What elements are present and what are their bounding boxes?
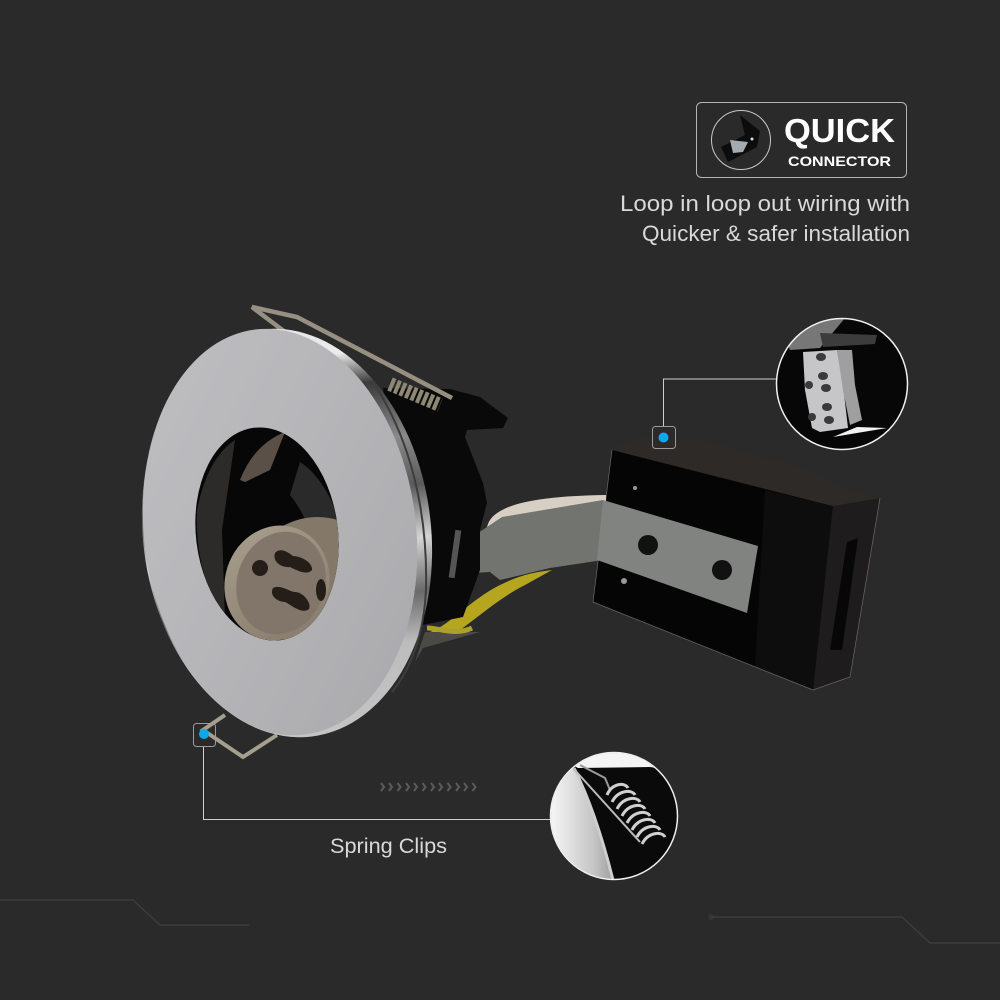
circuit line left bbox=[0, 900, 249, 925]
inset: connector detail bbox=[776, 318, 908, 450]
body bbox=[383, 388, 508, 625]
badge: quick connector bbox=[696, 102, 906, 178]
terminal block bbox=[803, 350, 848, 432]
badge title: QUICK bbox=[784, 112, 895, 149]
box front bbox=[593, 450, 840, 690]
socket holes bbox=[252, 550, 326, 611]
bottom clip bbox=[203, 715, 277, 757]
callout: connector marker bbox=[652, 379, 776, 448]
spring bbox=[390, 384, 440, 405]
lower bracket bbox=[415, 632, 480, 662]
description text: Quicker & safer installation bbox=[642, 221, 910, 246]
chrome face bbox=[120, 313, 440, 751]
top clip bbox=[252, 307, 452, 398]
label: spring clips: Spring Clips bbox=[330, 835, 447, 858]
rim highlight bbox=[375, 385, 426, 692]
circuit line right bbox=[708, 914, 1000, 943]
chrome rim bbox=[119, 312, 455, 754]
metal strap bbox=[473, 500, 603, 580]
box top bbox=[612, 437, 880, 508]
icon: connector bbox=[721, 115, 760, 162]
socket back bbox=[283, 517, 339, 640]
product: connector box bbox=[430, 437, 880, 690]
yellow wire bbox=[430, 570, 552, 640]
inset: spring detail bbox=[550, 752, 680, 880]
socket face bbox=[224, 526, 330, 640]
opening bbox=[195, 428, 339, 640]
spring coils bbox=[607, 784, 665, 844]
badge subtitle: CONNECTOR bbox=[788, 153, 891, 169]
box side bbox=[813, 498, 880, 690]
description text: Loop in loop out wiring with bbox=[620, 191, 910, 216]
pins bbox=[621, 486, 637, 584]
product: downlight bbox=[119, 307, 508, 757]
screws bbox=[638, 535, 732, 580]
white wire bbox=[487, 495, 606, 528]
description text bbox=[620, 191, 910, 246]
chevrons bbox=[381, 783, 476, 791]
callout: clip marker bbox=[194, 724, 550, 820]
